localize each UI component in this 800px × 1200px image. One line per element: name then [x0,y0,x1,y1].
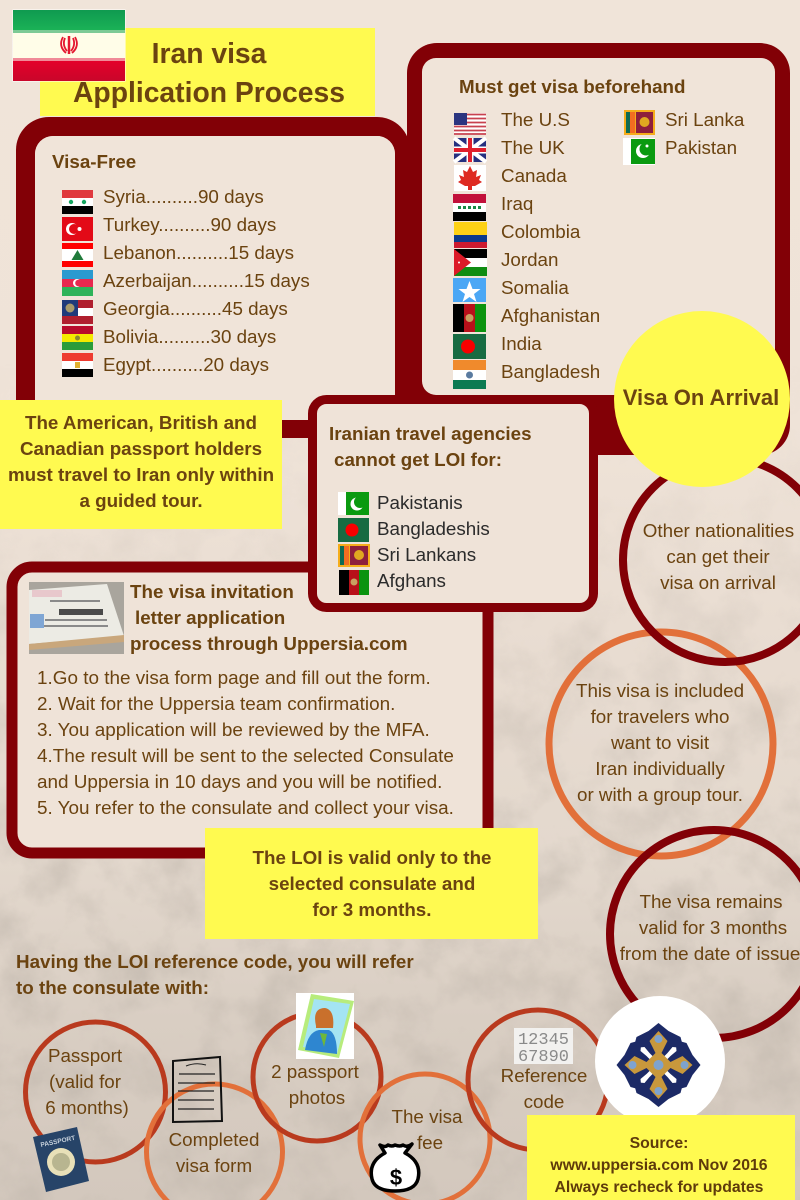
panel: application process: 3. You application will be reviewed by the MFA. [37,720,430,741]
flag: Canada [454,165,486,191]
circle: visa fee: fee [417,1132,443,1153]
list: must get visa countries: Sri Lanka [665,109,745,130]
list: must get visa countries: Somalia [501,277,569,298]
list: visa-free countries: Egypt..........20 days [103,354,269,375]
flag: Afghanistan [453,304,486,332]
flag: Syria [62,190,93,214]
circle: visa validity: valid for 3 months [639,917,787,938]
flag: Sri Lanka [338,544,370,567]
panel: application process: 2. Wait for the Uppersia team confirmation. [37,694,395,715]
list: must get visa countries: Jordan [501,249,558,270]
callout: LOI validity: The LOI is valid only to the [253,847,491,868]
icon: Iran flag [12,10,126,82]
callout: source: Source: [630,1135,688,1152]
list: visa-free countries: Turkey..........90 days [103,214,276,235]
panel: application process: process through Uppersia.com [130,633,408,654]
panel: application process [12,567,488,853]
panel: Iranian travel agencies: Bangladeshis [377,518,490,539]
circle: other nationalities: can get their [666,546,770,567]
callout: visa on arrival [614,311,790,487]
flag: Bangladesh [453,334,486,359]
circle: other nationalities [623,458,800,662]
callout: LOI validity: for 3 months. [313,899,431,920]
panel: application process: 5. You refer to the consulate and collect your visa. [37,798,454,819]
circle: completed visa form: visa form [176,1155,252,1176]
panel: must get visa frame [407,43,790,455]
panel: Iranian travel agencies: Iranian travel agencies [329,423,532,444]
circle: visa validity: from the date of issue [620,943,800,964]
panel: Iranian travel agencies: cannot get LOI for: [334,449,502,470]
callout: source [527,1115,795,1200]
flag: Somalia [453,278,486,302]
flag: Jordan [454,249,487,276]
circle: other nationalities: visa on arrival [660,572,776,593]
title box: Iran visa [152,37,267,69]
callout: visa on arrival: Visa On Arrival [623,385,779,410]
callout: source: Always recheck for updates [555,1179,764,1196]
circle: passport photos: 2 passport [271,1061,360,1082]
circle: visa inclusion: or with a group tour. [577,784,743,805]
callout: LOI validity [205,828,538,939]
flag: Bolivia [62,326,93,350]
list: visa-free countries [62,186,310,377]
panel: application process: 1.Go to the visa form page and fill out the form. [37,668,431,689]
icon: reference numbers: 67890 [518,1048,569,1067]
icon: reference numbers [514,1028,573,1067]
list: visa-free countries: Azerbaijan..........15 days [103,270,310,291]
flag: Colombia [454,222,487,248]
circle: visa validity [610,830,800,1038]
title box [40,28,375,116]
icon: reference numbers: 12345 [518,1031,569,1050]
list: must get visa countries: Iraq [501,193,533,214]
circle: visa inclusion: for travelers who [591,706,729,727]
list: must get visa countries: Afghanistan [501,305,600,326]
list: must get visa countries: The U.S [501,109,570,130]
flag: Turkey [62,217,93,241]
circle: visa inclusion: want to visit [610,732,710,753]
list: must get visa countries [453,109,745,389]
circle: passport [26,1022,166,1162]
list: visa-free countries: Syria..........90 days [103,186,264,207]
circle: visa inclusion: Iran individually [595,758,725,779]
heading: consulate requirements: to the consulate with: [16,977,209,998]
list: must get visa countries: Colombia [501,221,581,242]
callout: guided tour note [0,400,282,529]
heading: consulate requirements: Having the LOI reference code, you will refer [16,951,414,972]
circle: passport photos [253,1013,381,1141]
panel: Iranian travel agencies: Pakistanis [377,492,463,513]
callout: guided tour note: The American, British and [25,412,257,433]
flag: U.S. [454,113,486,135]
panel: visa-free frame [16,117,640,455]
callout: guided tour note: a guided tour. [79,490,203,511]
icon: passport booklet [33,1127,89,1192]
icon: portrait [296,993,354,1059]
panel: Iranian travel agencies [312,400,594,608]
list: must get visa countries: Bangladesh [501,361,600,382]
icon: paper form [173,1057,222,1122]
list: must get visa countries: The UK [501,137,565,158]
flag: Pakistan [623,138,655,165]
circle: completed visa form [146,1084,282,1200]
circle: passport: Passport [48,1045,123,1066]
flag: India [453,360,486,389]
heading: consulate requirements [16,951,414,998]
flag: Sri Lanka [624,110,655,135]
list: must get visa countries: Pakistan [665,137,737,158]
photo: invitation letter [29,582,124,654]
panel: application process: letter application [135,607,285,628]
icon: passport booklet: PASSPORT [40,1135,76,1149]
callout: LOI validity: selected consulate and [269,873,475,894]
flag: Azerbaijan [62,270,93,296]
icon: money bag [371,1144,419,1191]
panel: application process: and Uppersia in 10 days and you will be notified. [37,772,442,793]
circle: visa fee [360,1074,490,1200]
circle: visa validity: The visa remains [640,891,782,912]
circle: passport: (valid for [49,1071,121,1092]
text: must get visa heading: Must get visa beforehand [459,76,685,97]
flag: Pakistan [338,492,369,515]
callout: source: www.uppersia.com Nov 2016 [549,1157,768,1174]
circle: visa inclusion: This visa is included [576,680,744,701]
circle: reference code: Reference [501,1065,587,1086]
circle: completed visa form: Completed [169,1129,259,1150]
list: must get visa countries: Canada [501,165,567,186]
panel: application process: The visa invitation [130,581,294,602]
flag: Afghanistan [339,570,369,595]
list: visa-free countries: Bolivia..........30 days [103,326,276,347]
circle: reference code [468,1010,608,1150]
circle: other nationalities: Other nationalities [643,520,794,541]
title box: Application Process [73,76,345,108]
flag: Lebanon [62,243,93,267]
panel: Iranian travel agencies: Sri Lankans [377,544,476,565]
circle: reference code: code [524,1091,564,1112]
callout: guided tour note: must travel to Iran only within [8,464,274,485]
flag: UK [454,138,486,162]
flag: Bangladesh [338,518,369,542]
circle: passport: 6 months) [45,1097,129,1118]
text: visa-free heading: Visa-Free [52,151,136,172]
background [0,500,800,1200]
icon: money bag: $ [390,1165,402,1190]
flag: Georgia [62,300,93,324]
circle: passport photos: photos [289,1087,345,1108]
callout: guided tour note: Canadian passport holders [20,438,262,459]
circle: visa inclusion [549,632,773,856]
list: visa-free countries: Lebanon..........15 days [103,242,294,263]
flag: Iraq [453,194,486,221]
panel: application process: 4.The result will be sent to the selected Consulate [37,746,454,767]
list: visa-free countries: Georgia..........45 days [103,298,288,319]
circle: visa fee: The visa [392,1106,463,1127]
panel: Iranian travel agencies: Afghans [377,570,446,591]
flag: Egypt [62,353,93,377]
list: must get visa countries: India [501,333,542,354]
logo: Persian tile ornament [595,996,725,1126]
